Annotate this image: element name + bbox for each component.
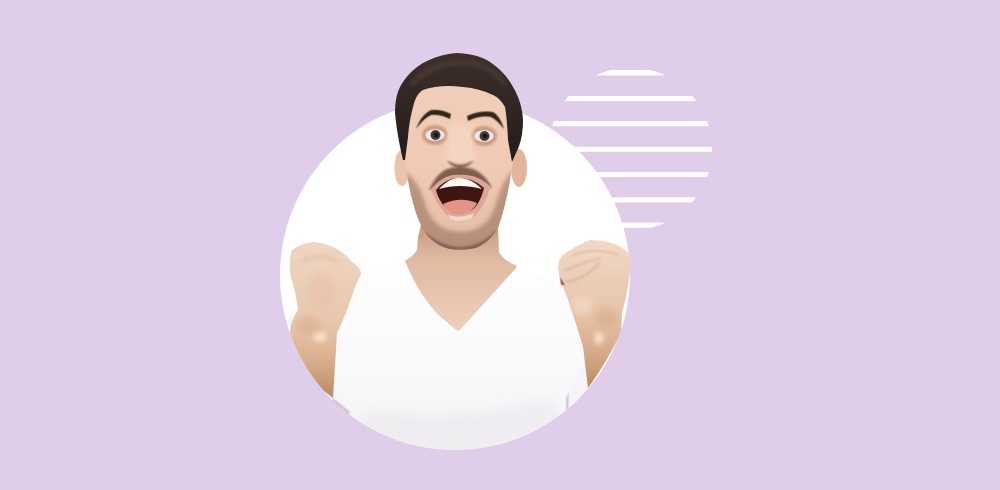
sleeves bbox=[287, 313, 332, 399]
beard stubble bbox=[407, 170, 512, 250]
left arm and fist bbox=[290, 242, 361, 398]
right finger detail bbox=[572, 251, 618, 256]
teeth bbox=[439, 178, 482, 189]
right eye bbox=[474, 130, 494, 142]
nose bbox=[445, 125, 476, 166]
eye sockets bbox=[422, 125, 448, 145]
t-shirt bbox=[287, 261, 590, 455]
neck bbox=[404, 225, 518, 332]
ears bbox=[394, 150, 410, 186]
right arm and fist bbox=[558, 240, 631, 388]
left wrist highlight bbox=[313, 332, 327, 342]
face bbox=[405, 70, 513, 250]
hair highlight bbox=[412, 62, 505, 85]
eyebrows bbox=[416, 110, 504, 129]
hair bbox=[395, 53, 523, 162]
tongue bbox=[443, 200, 477, 215]
lips bbox=[431, 175, 490, 220]
shirt fold shadows bbox=[360, 400, 560, 455]
right wrist highlight bbox=[594, 332, 604, 344]
left eye bbox=[426, 129, 444, 141]
mouth bbox=[436, 178, 484, 213]
illustration: excited man in circle on lilac background bbox=[280, 53, 712, 450]
white circle bbox=[280, 100, 630, 450]
striped decorative circle bbox=[552, 70, 712, 228]
man bbox=[287, 53, 631, 455]
moustache bbox=[429, 167, 492, 190]
left fist shading bbox=[300, 256, 340, 262]
